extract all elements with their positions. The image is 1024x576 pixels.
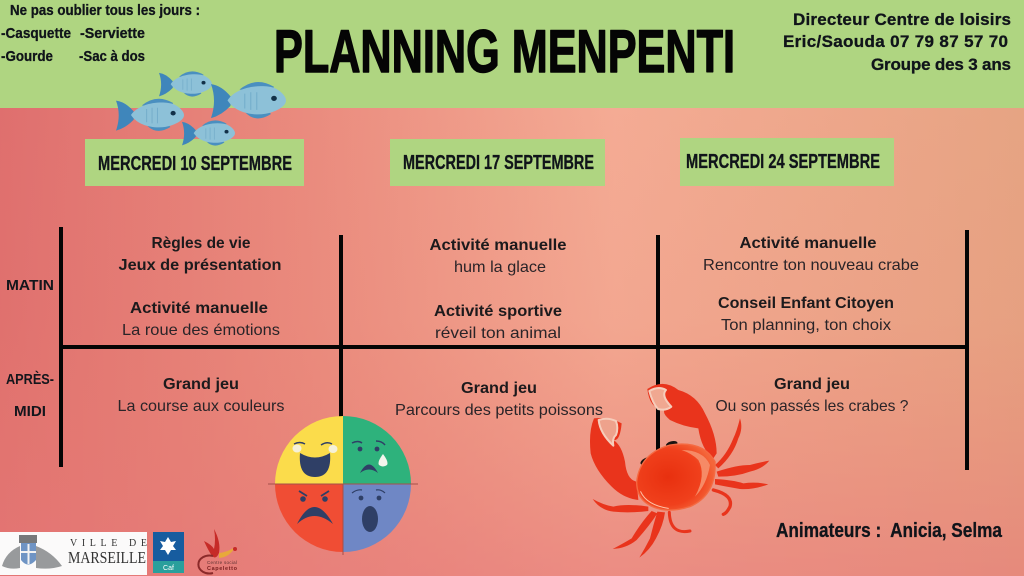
logo: centre social capeletto: [198, 529, 238, 574]
contact text block: Eric/Saouda 07 79 87 57 70: [783, 32, 1008, 51]
logo: caf: Caf: [163, 565, 174, 572]
column 2 morning text: Activité sportive: [434, 303, 562, 320]
contact text block: Groupe des 3 ans: [871, 55, 1011, 74]
crab body: [637, 444, 715, 510]
date box 1: MERCREDI 10 SEPTEMBRE: [98, 153, 292, 175]
logo: centre social capeletto: Capeletto: [207, 566, 238, 572]
reminder text block: [1, 2, 200, 65]
date box 2: MERCREDI 17 SEPTEMBRE: [403, 152, 594, 174]
reminder text block: -Casquette: [1, 25, 71, 42]
reminder text block: -Gourde: [1, 48, 53, 65]
icon: fish top: [159, 71, 212, 97]
icon: fish large: [211, 82, 286, 118]
column 3 afternoon text: Ou son passés les crabes ?: [716, 398, 909, 415]
column 1 morning text: La roue des émotions: [122, 322, 280, 339]
column 1 morning text: [118, 235, 282, 339]
column 1 afternoon text: Grand jeu: [163, 376, 239, 393]
reminder text block: -Sac à dos: [79, 48, 145, 65]
icon: fish bottom: [182, 120, 235, 146]
laughing face: [292, 442, 338, 477]
column 1 morning text: Règles de vie: [152, 235, 251, 252]
column 2 morning text: réveil ton animal: [435, 325, 561, 342]
column 1 morning text: Jeux de présentation: [118, 257, 282, 274]
logo: caf: [153, 532, 184, 573]
column 2 afternoon text: Grand jeu: [461, 380, 537, 397]
row label: après-midi: MIDI: [14, 403, 46, 420]
column 2 morning text: [430, 237, 567, 342]
contact text block: [783, 10, 1011, 74]
logo: centre social capeletto: Centre social: [207, 560, 237, 565]
date box 2: [390, 139, 605, 186]
date box 3: MERCREDI 24 SEPTEMBRE: [686, 151, 880, 173]
timetable grid: [59, 227, 969, 470]
icon: school of fish: [116, 71, 286, 146]
header band: [0, 0, 1024, 108]
reminder text block: -Serviette: [80, 25, 145, 42]
column 3 morning text: Rencontre ton nouveau crabe: [703, 257, 919, 274]
column 2 morning text: hum la glace: [454, 259, 546, 276]
crest: [2, 535, 62, 569]
logo: ville de marseille: [0, 532, 147, 575]
column 3 morning text: [703, 235, 919, 334]
column 3 morning text: Ton planning, ton choix: [721, 317, 891, 334]
column 3 morning text: Activité manuelle: [740, 235, 877, 252]
contact text block: Directeur Centre de loisirs: [793, 10, 1011, 29]
column 3 morning text: Conseil Enfant Citoyen: [718, 295, 894, 312]
row label: après-midi: APRÈS-: [6, 371, 54, 388]
date box 3: [680, 138, 894, 186]
reminder text block: Ne pas oublier tous les jours :: [10, 2, 200, 19]
column 1 afternoon text: La course aux couleurs: [118, 398, 284, 415]
row label: matin: MATIN: [6, 277, 54, 294]
row label: après-midi: [6, 371, 54, 420]
column 3 afternoon text: Grand jeu: [774, 376, 850, 393]
column 2 morning text: Activité manuelle: [430, 237, 567, 254]
icon: fish left: [116, 99, 184, 131]
column 2 afternoon text: [395, 380, 603, 419]
logo: ville de marseille: VILLE DE: [70, 538, 147, 549]
crab eyes: [639, 455, 654, 467]
icon: crab: [590, 384, 769, 558]
date box 1: [85, 139, 304, 186]
column 1 afternoon text: [118, 376, 284, 415]
icon: emotion wheel: [268, 416, 418, 555]
title: PLANNING MENPENTI: [274, 18, 735, 85]
crab legs: [593, 418, 769, 558]
angry face: [297, 491, 333, 524]
surprised face: [352, 490, 385, 532]
logo: ville de marseille: MARSEILLE: [68, 548, 146, 567]
column 3 afternoon text: [716, 376, 909, 415]
column 1 morning text: Activité manuelle: [130, 300, 268, 317]
column 2 afternoon text: Parcours des petits poissons: [395, 402, 603, 419]
crying face: [352, 441, 388, 473]
crab right claw and arm: [647, 384, 717, 458]
crab left claw and arm: [590, 418, 638, 500]
